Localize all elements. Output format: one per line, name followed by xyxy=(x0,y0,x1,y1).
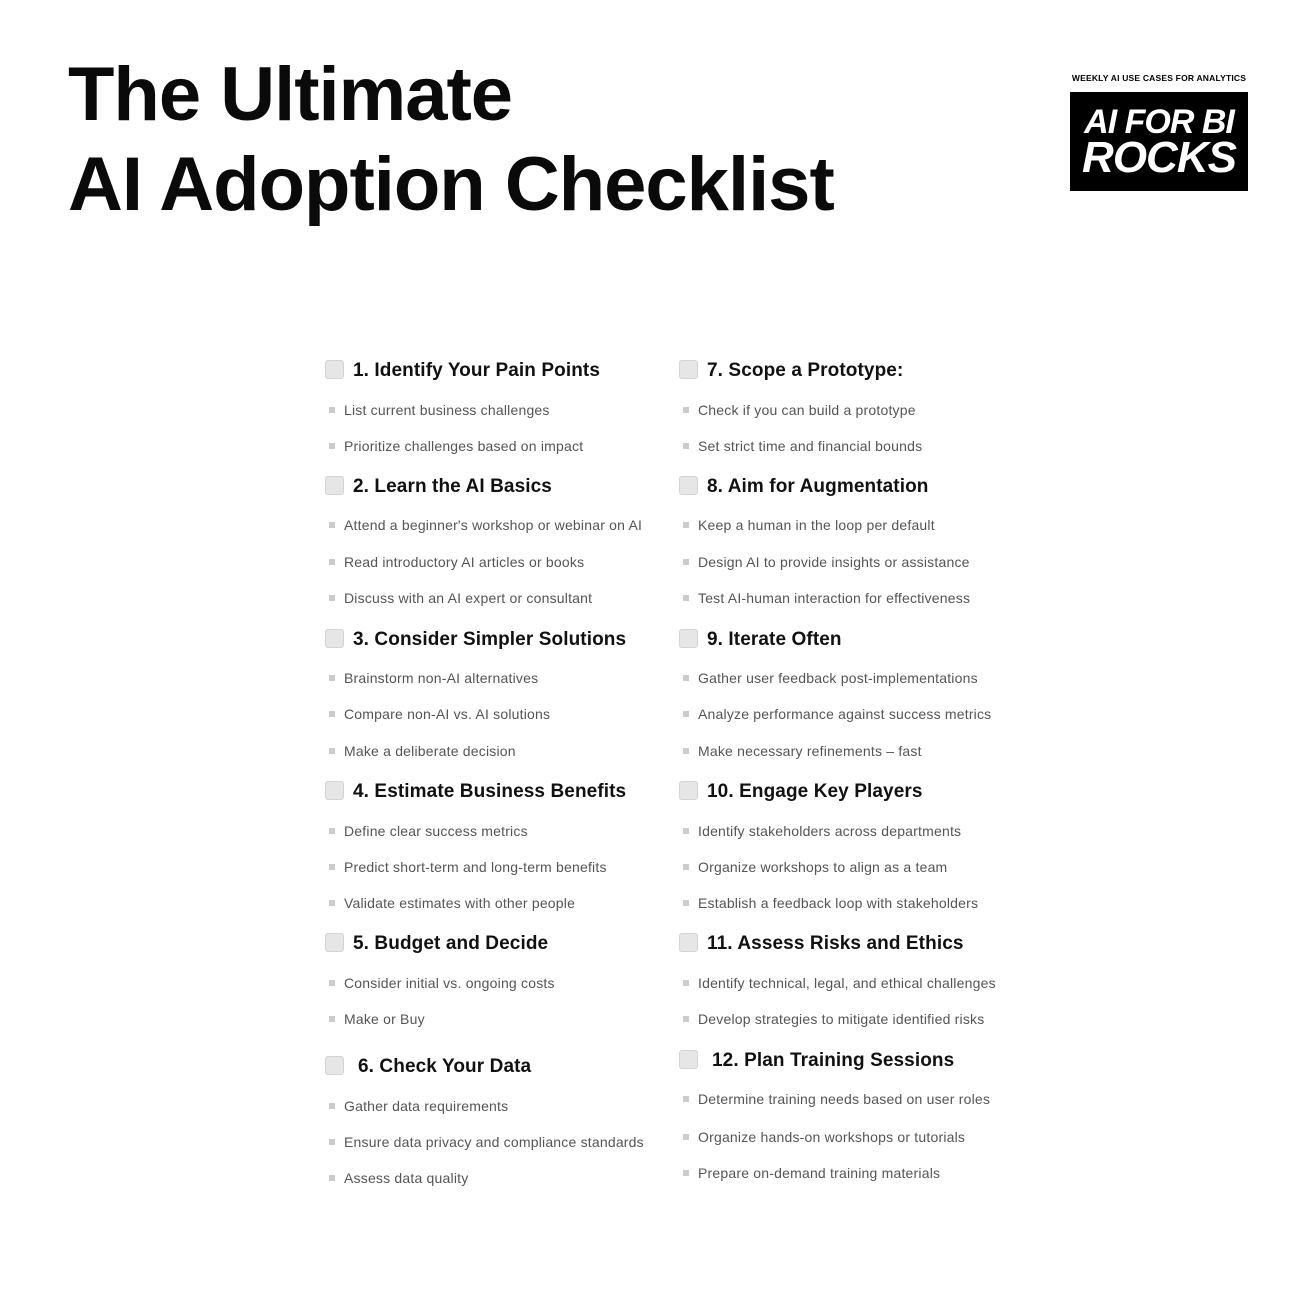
checklist: 5. Budget and Decide xyxy=(353,933,548,954)
checklist: Ensure data privacy and compliance standards xyxy=(344,1134,644,1150)
checklist xyxy=(325,360,996,1186)
checklist: Read introductory AI articles or books xyxy=(344,554,584,570)
checklist: Check if you can build a prototype xyxy=(698,402,916,418)
checklist: Validate estimates with other people xyxy=(344,895,575,911)
checklist: Make or Buy xyxy=(344,1011,425,1027)
checklist: Organize workshops to align as a team xyxy=(698,859,947,875)
checklist: Attend a beginner's workshop or webinar on AI xyxy=(344,517,642,533)
checklist: Prepare on-demand training materials xyxy=(698,1165,940,1181)
checklist: 7. Scope a Prototype: xyxy=(707,360,903,381)
logo box xyxy=(1070,92,1248,191)
checklist: 6. Check Your Data xyxy=(358,1056,531,1077)
checklist: Compare non-AI vs. AI solutions xyxy=(344,706,550,722)
checklist: 3. Consider Simpler Solutions xyxy=(353,629,626,650)
checklist: 12. Plan Training Sessions xyxy=(712,1050,954,1071)
checklist: Prioritize challenges based on impact xyxy=(344,438,583,454)
logo box: ROCKS xyxy=(1082,133,1236,182)
right column xyxy=(679,360,996,1181)
checklist: Brainstorm non-AI alternatives xyxy=(344,670,538,686)
checklist: Consider initial vs. ongoing costs xyxy=(344,975,555,991)
logo box: AI FOR BI xyxy=(1084,103,1234,141)
checklist: List current business challenges xyxy=(344,402,550,418)
checklist: Design AI to provide insights or assistance xyxy=(698,554,970,570)
checklist: Test AI-human interaction for effectiveness xyxy=(698,590,970,606)
checklist: Set strict time and financial bounds xyxy=(698,438,922,454)
checklist: Make a deliberate decision xyxy=(344,743,516,759)
checklist: 8. Aim for Augmentation xyxy=(707,476,929,497)
checklist: 1. Identify Your Pain Points xyxy=(353,360,600,381)
logo tagline: WEEKLY AI USE CASES FOR ANALYTICS xyxy=(1072,73,1246,83)
checklist: Develop strategies to mitigate identified risks xyxy=(698,1011,984,1027)
checklist: 10. Engage Key Players xyxy=(707,781,923,802)
checklist: Analyze performance against success metrics xyxy=(698,706,991,722)
checklist: 4. Estimate Business Benefits xyxy=(353,781,626,802)
checklist: Keep a human in the loop per default xyxy=(698,517,935,533)
checklist: Organize hands-on workshops or tutorials xyxy=(698,1129,965,1145)
checklist: Gather user feedback post-implementations xyxy=(698,670,978,686)
checklist: Identify technical, legal, and ethical challenges xyxy=(698,975,996,991)
checklist: 11. Assess Risks and Ethics xyxy=(707,933,964,954)
title: AI Adoption Checklist xyxy=(68,142,834,227)
checklist: Define clear success metrics xyxy=(344,823,528,839)
checklist: Make necessary refinements – fast xyxy=(698,743,922,759)
checklist: Identify stakeholders across departments xyxy=(698,823,961,839)
checklist: Gather data requirements xyxy=(344,1098,508,1114)
checklist: 2. Learn the AI Basics xyxy=(353,476,552,497)
logo xyxy=(1070,73,1248,191)
title xyxy=(68,52,834,227)
checklist: 9. Iterate Often xyxy=(707,629,842,650)
title: The Ultimate xyxy=(68,52,512,137)
checklist: Determine training needs based on user roles xyxy=(698,1091,990,1107)
checklist: Predict short-term and long-term benefits xyxy=(344,859,607,875)
left column xyxy=(325,360,644,1186)
checklist: Establish a feedback loop with stakeholders xyxy=(698,895,978,911)
checklist: Discuss with an AI expert or consultant xyxy=(344,590,592,606)
checklist: Assess data quality xyxy=(344,1170,468,1186)
